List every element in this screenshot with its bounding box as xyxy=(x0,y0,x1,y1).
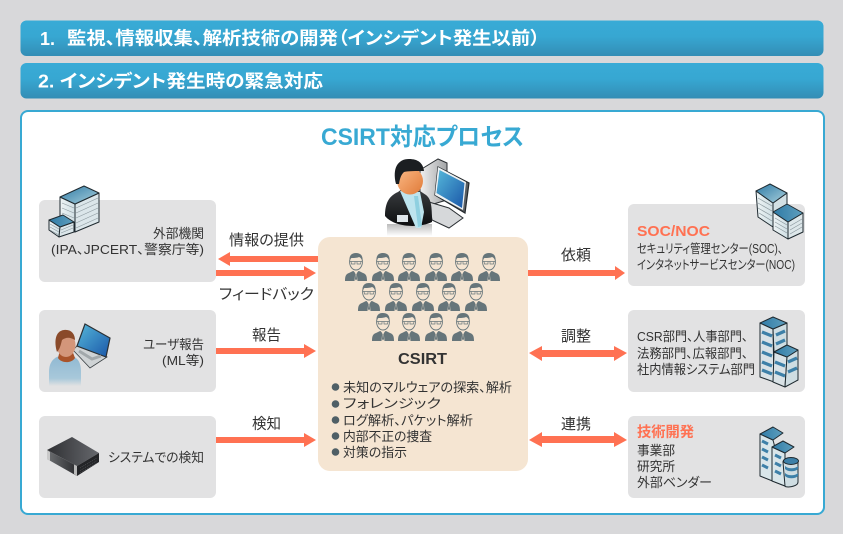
icon: office building right xyxy=(756,184,803,239)
icon: buildings with database xyxy=(760,427,798,487)
icon: rack server xyxy=(47,437,99,476)
panel: user report xyxy=(39,310,216,392)
icon: tall building xyxy=(760,317,798,387)
arrow: cooperation: 連携 xyxy=(561,416,591,433)
icon: office building left xyxy=(49,186,99,237)
heading bar 1 xyxy=(20,20,824,56)
panel: technology development: 技術開発 xyxy=(637,423,694,441)
panel: SOC/NOC: SOC/NOC xyxy=(637,223,710,240)
CSIRT task list: ログ解析、パケット解析 xyxy=(343,413,473,428)
arrow: coordination xyxy=(529,328,627,361)
panel: SOC/NOC: セキュリティ管理センター(SOC)、 xyxy=(637,241,783,256)
CSIRT task list: 内部不正の捜査 xyxy=(343,429,432,444)
panel: system detection: システムでの検知 xyxy=(108,450,204,465)
panel: CSIRT centre xyxy=(318,237,528,471)
panel: external organisations: (IPA、JPCERT、警察庁等) xyxy=(51,242,204,257)
panel: SOC/NOC: インタネットサービスセンター(NOC) xyxy=(637,258,795,272)
panel: system detection xyxy=(39,416,216,498)
arrow: report: 報告 xyxy=(252,327,281,344)
arrow: detection: 検知 xyxy=(252,416,281,432)
panel: external organisations: 外部機関 xyxy=(153,226,204,241)
arrow: feedback xyxy=(216,266,316,303)
heading bar 2: 2. インシデント発生時の緊急対応 xyxy=(38,70,323,92)
panel: user report: ユーザ報告 xyxy=(143,337,204,352)
team icons xyxy=(345,253,500,341)
arrow: cooperation xyxy=(529,416,627,447)
arrow: report xyxy=(216,327,316,358)
heading bar 1: 1. xyxy=(40,29,55,49)
panel: technology development: 外部ベンダー xyxy=(637,475,712,490)
arrow: coordination: 調整 xyxy=(561,328,591,345)
arrow: information provision xyxy=(218,232,318,266)
main panel xyxy=(21,111,824,514)
arrow: detection xyxy=(216,416,316,447)
panel: SOC/NOC xyxy=(628,204,805,286)
arrow: feedback: フィードバック xyxy=(219,286,314,303)
heading bar 1: 監視、情報収集、解析技術の開発（インシデント発生以前） xyxy=(67,28,540,48)
panel title: CSIRT対応プロセス xyxy=(321,124,524,151)
CSIRT task list xyxy=(332,380,512,460)
CSIRT task list: フォレンジック xyxy=(343,396,441,411)
panel: departments xyxy=(628,310,805,392)
heading bar 2 xyxy=(20,63,824,98)
panel: technology development: 研究所 xyxy=(637,459,675,474)
panel: departments: 法務部門、広報部門、 xyxy=(637,346,748,361)
panel: departments: 社内情報システム部門 xyxy=(637,362,755,377)
CSIRT label: CSIRT xyxy=(398,351,447,368)
arrow: request: 依頼 xyxy=(561,247,591,264)
panel: external organisations xyxy=(39,200,216,282)
icon: operator with computer xyxy=(385,159,469,236)
icon: user with laptop xyxy=(49,324,110,386)
CSIRT task list: 対策の指示 xyxy=(343,445,407,460)
arrow: information provision: 情報の提供 xyxy=(229,232,304,249)
arrow: request xyxy=(528,247,625,280)
CSIRT task list: 未知のマルウェアの探索、解析 xyxy=(343,380,512,395)
panel: technology development: 事業部 xyxy=(637,443,675,458)
panel: user report: (ML等) xyxy=(162,353,204,368)
panel: technology development xyxy=(628,416,805,498)
panel: departments: CSR部門、人事部門、 xyxy=(637,329,748,344)
